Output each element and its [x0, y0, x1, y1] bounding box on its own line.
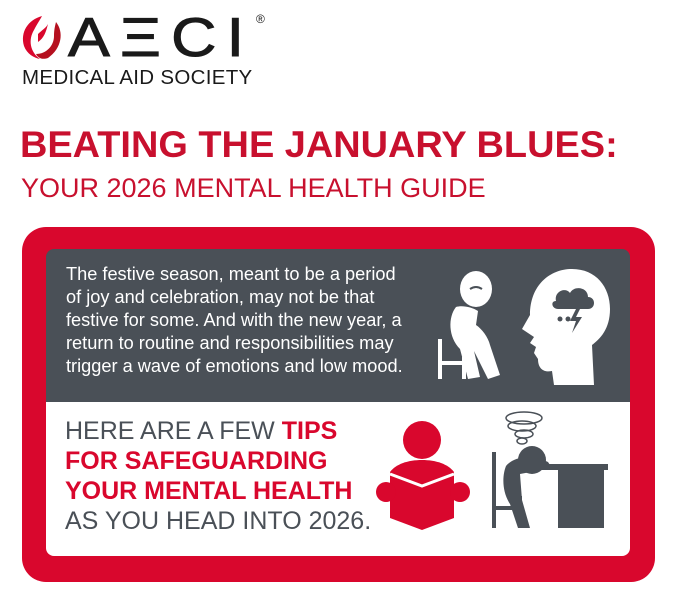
panel: dark intro	[46, 249, 630, 402]
title: BEATING THE JANUARY BLUES:	[20, 124, 618, 165]
text block: intro	[66, 264, 403, 376]
icon: person reading	[376, 421, 470, 530]
text block: tips heading	[65, 417, 371, 535]
subtitle: YOUR 2026 MENTAL HEALTH GUIDE	[21, 173, 486, 203]
logo	[22, 6, 265, 89]
text block: intro: of joy and celebration, may not be that	[66, 287, 374, 307]
text block: tips heading: HERE ARE A FEW TIPS	[65, 417, 337, 445]
panel: white tips	[46, 402, 630, 556]
panel: red frame	[22, 227, 655, 582]
logo subtitle: MEDICAL AID SOCIETY	[22, 66, 252, 89]
logo: ®	[256, 12, 265, 26]
text block: intro: trigger a wave of emotions and low mood.	[66, 356, 403, 376]
logo wordmark: AΞCI	[68, 6, 254, 68]
text block: intro: festive for some. And with the new year, a	[66, 310, 402, 330]
icon: stressed person at desk	[492, 411, 608, 528]
text block: tips heading: FOR SAFEGUARDING	[65, 447, 328, 475]
text block: intro: The festive season, meant to be a period	[66, 264, 396, 284]
text block: tips heading: YOUR MENTAL HEALTH	[65, 477, 352, 505]
icon: red swirl	[22, 16, 61, 59]
text block: tips heading: AS YOU HEAD INTO 2026.	[65, 507, 371, 535]
icon: head with storm cloud	[522, 269, 610, 385]
text block: intro: return to routine and responsibilities may	[66, 333, 394, 353]
icon: sad sitting person	[438, 271, 500, 379]
